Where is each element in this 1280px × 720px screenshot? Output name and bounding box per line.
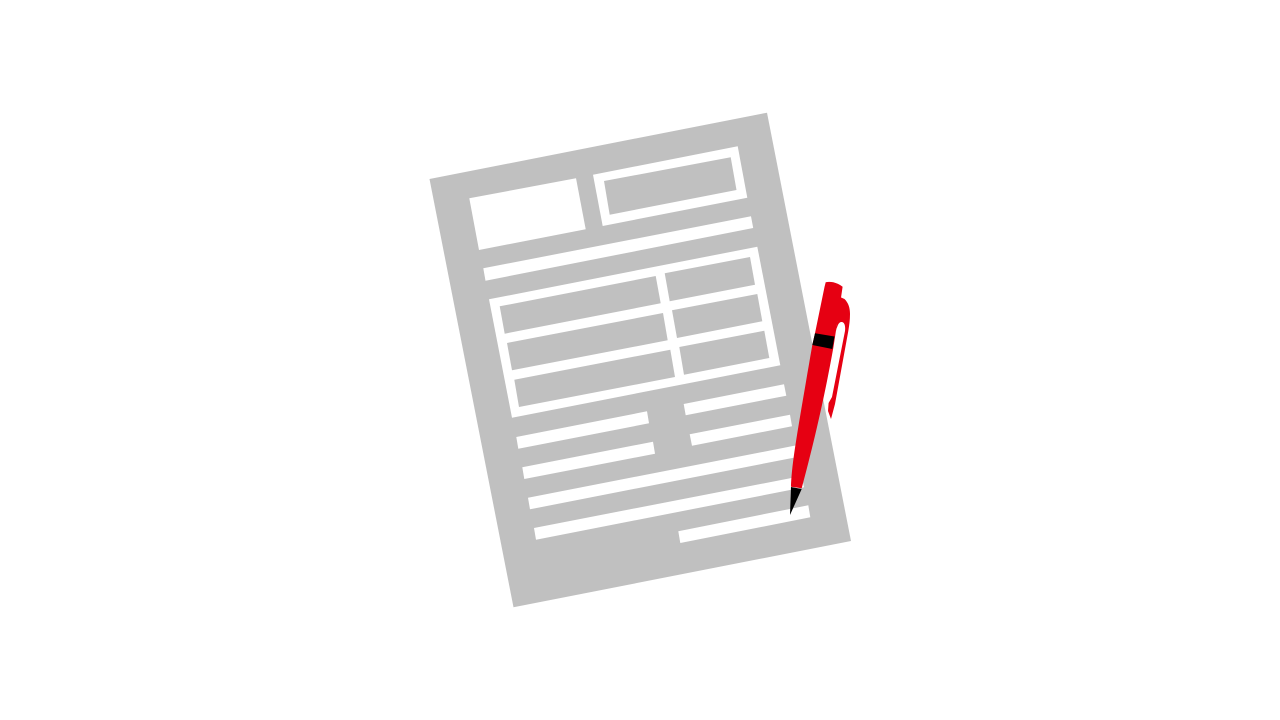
pen band — [812, 333, 834, 349]
paper sheet — [430, 113, 851, 607]
table — [489, 247, 780, 418]
white logo box — [469, 178, 586, 250]
pen tip — [790, 487, 802, 515]
text lines — [516, 384, 810, 543]
pen clip — [828, 297, 850, 419]
icon: red pen — [790, 282, 850, 515]
panel: paper form — [430, 113, 851, 607]
title bar — [483, 216, 753, 281]
pen body — [791, 282, 843, 488]
framed header box — [593, 146, 747, 226]
